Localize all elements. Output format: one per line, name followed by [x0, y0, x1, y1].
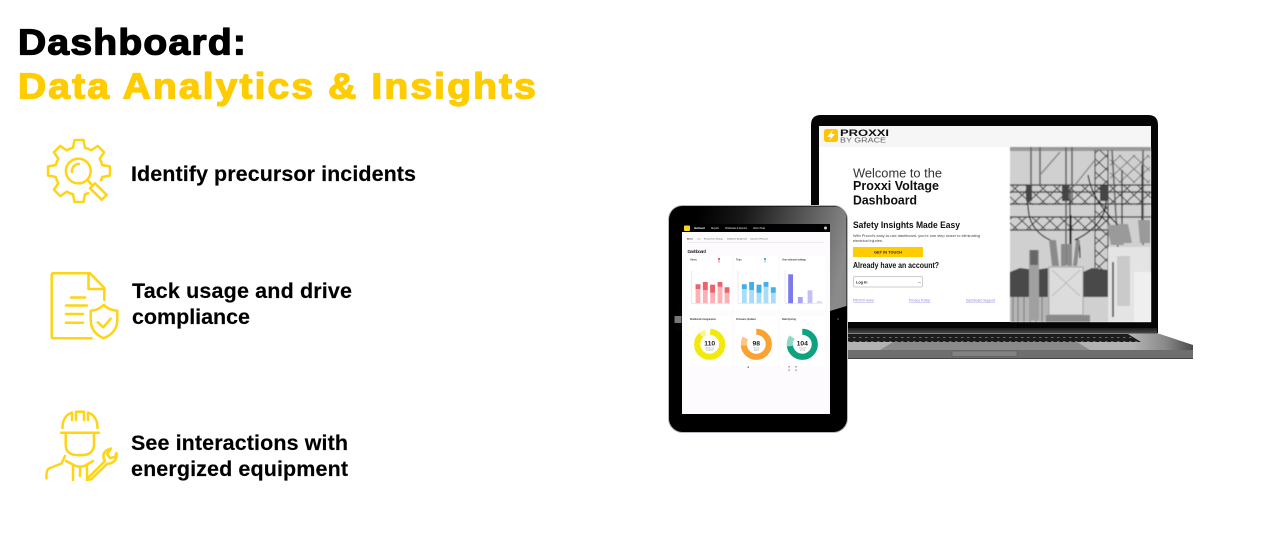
proxxi logo: [824, 128, 889, 144]
text: see interactions: energized equipment: [131, 457, 348, 481]
bar chart: user-selected settings: [780, 256, 825, 310]
tablet home button: [674, 316, 682, 323]
tablet camera: [837, 318, 839, 320]
donut chart: data syncing: [780, 316, 825, 366]
title: Data Analytics & Insights: [18, 67, 536, 107]
top navigation: Reports: [711, 227, 720, 230]
proxxi logo: PROXXI: [840, 128, 889, 138]
text: track usage: compliance: [132, 305, 250, 329]
footer links: Privacy Policy: [909, 298, 930, 302]
top navigation: Workloads & Reports: [725, 227, 748, 230]
welcome text: Welcome to the: [853, 166, 942, 180]
icon: gear with magnifier: [48, 140, 110, 202]
bar chart: trips: [734, 256, 778, 310]
donut chart: workbench assignments: Workbench Assignments: [690, 318, 717, 321]
top navigation: Dashboard: [694, 227, 705, 230]
welcome text: electrical injuries.: [853, 239, 883, 243]
donut chart: firmware updates: Firmware Updates: [736, 318, 757, 321]
text: see interactions: See interactions with: [131, 431, 348, 455]
icon: document with shield: [52, 273, 117, 338]
welcome text: With Proxxi's easy-to-use dashboard, you're one step closer to eliminating: [853, 234, 980, 238]
footer links: PROXXI Home: [853, 298, 874, 302]
dashboard heading: Dashboard: [688, 249, 706, 254]
get in touch button: [853, 247, 923, 257]
tablet: [668, 206, 848, 432]
tablet gloss: [670, 206, 846, 330]
donut chart: data syncing: synced: [799, 350, 805, 352]
sub navigation: Environment Settings: [704, 238, 724, 240]
text: see interactions: [131, 431, 348, 481]
welcome text: Proxxi Voltage: [853, 179, 939, 193]
welcome text: [853, 166, 980, 243]
welcome text: Safety Insights Made Easy: [853, 220, 960, 230]
sub navigation: Country Of Firmware: [750, 238, 769, 240]
title: Dashboard:: [18, 23, 246, 63]
donut chart: firmware updates: Units to: [753, 346, 759, 350]
donut chart: workbench assignments: [688, 316, 732, 366]
text: track usage: [132, 279, 352, 329]
tablet screen: [682, 224, 830, 414]
login field: [854, 276, 922, 287]
sub navigation: List: [697, 238, 701, 240]
photo: electrical substation: [1010, 147, 1151, 322]
top navigation: Admin Tools: [753, 227, 766, 230]
login field: →: [917, 280, 922, 284]
title: [18, 23, 536, 107]
bar chart: alerts: Alerts: [690, 258, 697, 262]
top navigation: [682, 224, 830, 232]
donut chart: firmware updates: 98: [753, 340, 760, 348]
proxxi logo: BY GRACE: [840, 136, 886, 144]
login field: Log In: [856, 280, 868, 284]
tablet body: [668, 206, 848, 432]
welcome text: Dashboard: [853, 194, 917, 208]
icon: worker with wrench: [46, 412, 117, 480]
donut chart: workbench assignments: Assets not: [706, 346, 714, 350]
donut chart: data syncing: Units not: [799, 346, 806, 350]
bar chart: trips: Trips: [736, 258, 742, 262]
donut chart: data syncing: Data Syncing: [782, 318, 797, 321]
bar chart: user-selected settings: User-selected settings: [782, 258, 807, 262]
text: track usage: Tack usage and drive: [132, 279, 352, 303]
sub navigation: Alerts: [687, 238, 694, 240]
donut chart: workbench assignments: 110: [704, 340, 715, 348]
account: Already have an account?: [853, 261, 939, 270]
laptop base: [840, 333, 1193, 359]
laptop lid: [811, 115, 1158, 333]
get in touch button: GET IN TOUCH: [874, 250, 902, 254]
laptop screen: [819, 126, 1151, 322]
sub navigation: [687, 238, 824, 243]
donut chart: workbench assignments: assigned: [706, 350, 713, 352]
footer links: Dashboard Support: [966, 298, 995, 302]
donut chart: data syncing: 104: [797, 340, 808, 348]
bar chart: alerts: [688, 256, 732, 310]
footer links: [853, 298, 995, 302]
text: identify precursor incidents: Identify precursor incidents: [131, 162, 416, 186]
donut chart: firmware updates: update: [754, 349, 759, 352]
sub navigation: Workbench Assignment: [727, 238, 747, 240]
laptop: [811, 115, 1193, 359]
tablet page controls: [748, 366, 797, 371]
donut chart: firmware updates: [734, 316, 778, 366]
